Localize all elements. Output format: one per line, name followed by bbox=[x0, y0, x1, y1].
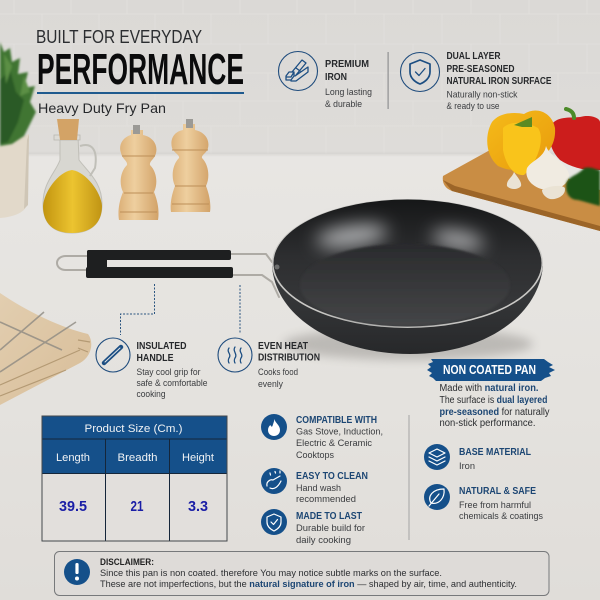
photo: fry pan bbox=[57, 199, 543, 360]
panel: non coated pan bbox=[424, 359, 555, 522]
wire handle loop bbox=[57, 254, 279, 297]
panel: care and compatibility: MADE TO LAST bbox=[296, 510, 362, 522]
description bbox=[440, 383, 550, 429]
feature: insulated handle: HANDLE bbox=[136, 352, 174, 364]
icon: layers bbox=[424, 444, 450, 470]
pan body bbox=[272, 266, 543, 354]
table values: 3.3 bbox=[188, 498, 208, 515]
disclaimer box: DISCLAIMER: bbox=[100, 557, 154, 567]
brush banner bbox=[427, 359, 555, 381]
yellow bell peppers bbox=[487, 110, 555, 175]
icon: iron ingots bbox=[278, 52, 318, 90]
photo: folded kitchen towel bbox=[0, 293, 91, 405]
panel: care and compatibility: COMPATIBLE WITH bbox=[296, 414, 377, 426]
feature: dual layer pre-seasoned: NATURAL IRON SURFACE bbox=[446, 75, 552, 87]
feature: insulated handle: Stay cool grip for bbox=[136, 367, 200, 378]
table values: 21 bbox=[130, 498, 144, 515]
feature: even heat distribution bbox=[218, 338, 320, 390]
handle grips bbox=[86, 250, 233, 278]
table values bbox=[59, 498, 208, 515]
icon: exclamation bbox=[64, 559, 90, 585]
panel: care and compatibility bbox=[261, 414, 383, 546]
panel: care and compatibility: Cooktops bbox=[296, 450, 334, 461]
photo: olive oil bottle bbox=[43, 119, 102, 233]
feature: premium iron: Long lasting bbox=[325, 87, 372, 98]
disclaimer box: These are not imperfections, but the natural signature of iron — shaped by air, time, and authenticity. bbox=[100, 579, 517, 589]
icon: washing hand bbox=[261, 468, 287, 494]
panel: non coated pan: Iron bbox=[459, 461, 475, 472]
table header: Product Size (Cm.) bbox=[84, 423, 182, 435]
description: pre-seasoned for naturally bbox=[440, 407, 550, 418]
icon: leaf bbox=[424, 484, 450, 510]
feature: premium iron bbox=[278, 52, 372, 110]
callout lines from pan to features bbox=[120, 284, 240, 335]
table header: Height bbox=[182, 452, 214, 464]
description: The surface is dual layered bbox=[440, 395, 548, 406]
panel: care and compatibility: Electric & Ceramic bbox=[296, 438, 372, 449]
feature: insulated handle bbox=[96, 338, 208, 400]
feature: even heat distribution: evenly bbox=[258, 379, 283, 390]
photo: potted plant bbox=[0, 42, 36, 218]
panel: care and compatibility: daily cooking bbox=[296, 535, 351, 546]
panel: care and compatibility: Durable build for bbox=[296, 523, 365, 534]
feature: premium iron: IRON bbox=[325, 71, 347, 83]
table: product size bbox=[42, 416, 227, 541]
table header: Breadth bbox=[118, 452, 158, 464]
feature: insulated handle: safe & comfortable bbox=[136, 378, 208, 389]
panel: care and compatibility: Gas Stove, Induction, bbox=[296, 426, 383, 438]
brush banner: NON COATED PAN bbox=[443, 363, 536, 377]
feature: dual layer pre-seasoned: Naturally non-stick bbox=[446, 90, 518, 100]
kicker: BUILT FOR EVERYDAY bbox=[36, 27, 202, 47]
panel: non coated pan: BASE MATERIAL bbox=[459, 446, 531, 458]
table header bbox=[42, 416, 227, 474]
panel: non coated pan: Free from harmful bbox=[459, 500, 531, 511]
panel: care and compatibility: Hand wash bbox=[296, 483, 341, 494]
table header: Length bbox=[56, 452, 90, 464]
pan cooking floor bbox=[300, 244, 510, 326]
photo: cutting board with vegetables bbox=[443, 109, 600, 231]
feature: dual layer pre-seasoned: DUAL LAYER bbox=[446, 50, 501, 62]
heading block bbox=[36, 27, 244, 116]
pan shadow bbox=[283, 328, 533, 360]
icon: handle bbox=[96, 338, 130, 372]
description: non-stick performance. bbox=[440, 418, 536, 429]
feature: premium iron: & durable bbox=[325, 99, 362, 110]
feature: even heat distribution: EVEN HEAT bbox=[258, 340, 308, 352]
feature: insulated handle: INSULATED bbox=[136, 340, 187, 352]
description: Made with natural iron. bbox=[440, 383, 539, 394]
pan highlights bbox=[315, 221, 485, 253]
feature: dual layer pre-seasoned: & ready to use bbox=[446, 101, 500, 112]
feature: dual layer pre-seasoned: PRE-SEASONED bbox=[446, 63, 515, 75]
pan rim bbox=[272, 199, 543, 328]
photo: pepper mills bbox=[118, 119, 210, 220]
garlic bbox=[507, 146, 569, 199]
parsley bbox=[566, 167, 600, 206]
table values: 39.5 bbox=[59, 498, 87, 515]
feature: even heat distribution: DISTRIBUTION bbox=[258, 352, 320, 364]
red bell pepper bbox=[550, 109, 600, 171]
panel: care and compatibility: recommended bbox=[296, 494, 356, 505]
icon: shield check bbox=[400, 52, 440, 92]
feature: even heat distribution: Cooks food bbox=[258, 367, 298, 378]
feature: premium iron: PREMIUM bbox=[325, 58, 369, 70]
feature: dual layer pre-seasoned bbox=[400, 50, 552, 112]
panel: non coated pan: chemicals & coatings bbox=[459, 511, 543, 522]
icon: heat waves bbox=[218, 338, 252, 372]
icon: flame bbox=[261, 414, 287, 440]
title: PERFORMANCE bbox=[37, 45, 244, 94]
pan interior bbox=[274, 200, 542, 326]
disclaimer box bbox=[54, 552, 549, 596]
disclaimer box: Since this pan is non coated. therefore You may notice subtle marks on the surface. bbox=[100, 568, 442, 578]
panel: care and compatibility: EASY TO CLEAN bbox=[296, 470, 368, 482]
feature: insulated handle: cooking bbox=[136, 389, 166, 400]
icon: durable shield bbox=[261, 509, 287, 535]
panel: non coated pan: NATURAL & SAFE bbox=[459, 485, 536, 497]
subtitle: Heavy Duty Fry Pan bbox=[38, 100, 166, 116]
